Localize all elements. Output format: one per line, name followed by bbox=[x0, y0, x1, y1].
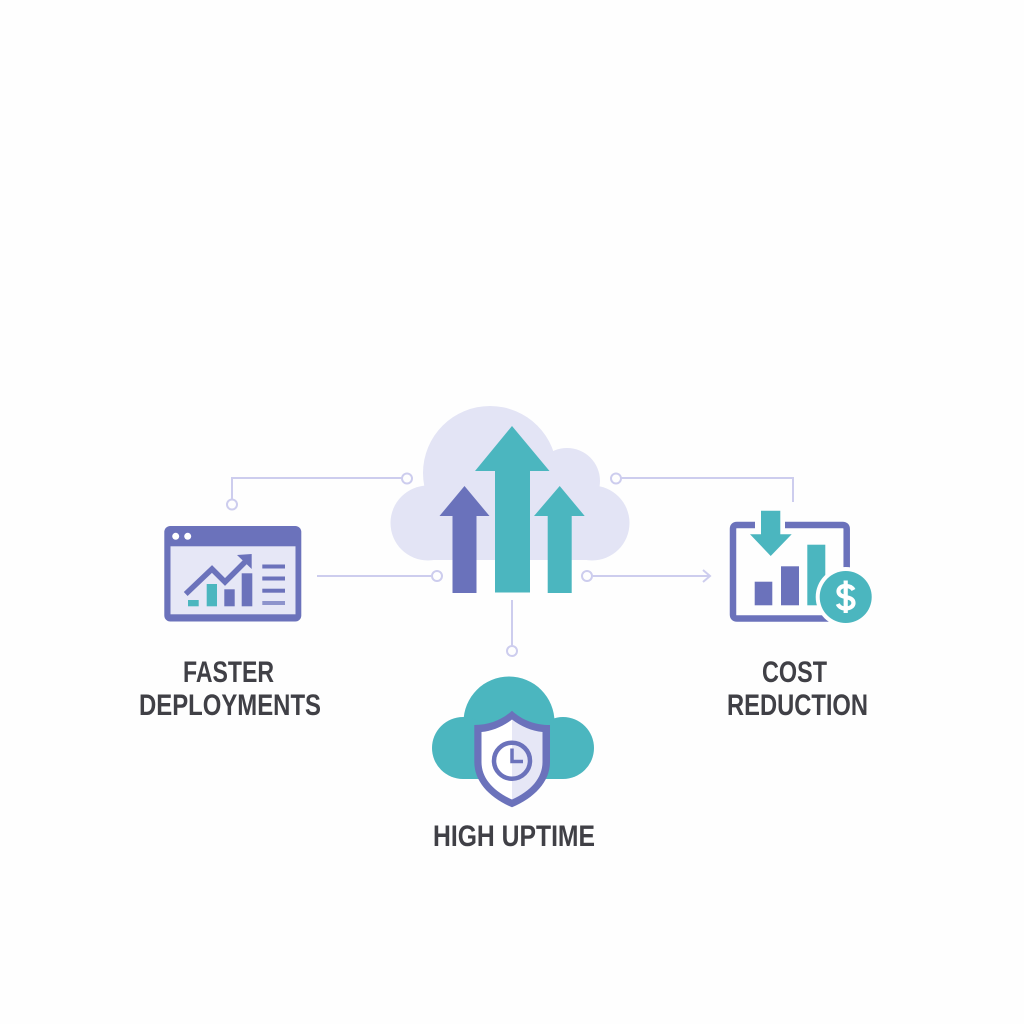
connector: bottom bbox=[507, 600, 517, 656]
icon: central cloud with arrows bbox=[390, 406, 630, 593]
browser content area bbox=[170, 546, 296, 614]
arrow: centre teal bbox=[475, 426, 550, 592]
chart frame bbox=[733, 525, 847, 618]
bars bbox=[188, 573, 252, 606]
list lines bbox=[262, 564, 285, 605]
connector: middle left bbox=[317, 571, 442, 581]
label: faster deployments: FASTER bbox=[183, 656, 274, 689]
label: cost reduction bbox=[727, 656, 868, 722]
connector: top right bbox=[611, 474, 793, 502]
label: cost reduction: COST bbox=[762, 656, 827, 689]
window dots bbox=[172, 533, 191, 540]
icon: browser dashboard bbox=[164, 526, 301, 622]
label: high uptime: HIGH UPTIME bbox=[433, 820, 595, 853]
connector: top left bbox=[227, 474, 412, 510]
clock bbox=[494, 743, 530, 779]
icon: cost reduction bbox=[733, 511, 876, 627]
browser frame bbox=[164, 526, 301, 622]
arrow: left purple bbox=[440, 486, 490, 593]
icon: cloud with shield bbox=[432, 676, 594, 807]
label: faster deployments bbox=[139, 656, 321, 722]
trend arrow bbox=[186, 554, 252, 594]
bars bbox=[755, 545, 825, 605]
shield bbox=[474, 711, 550, 807]
label: cost reduction: REDUCTION bbox=[727, 689, 868, 722]
connector arrow: middle right bbox=[582, 570, 710, 582]
down arrow bbox=[750, 511, 792, 556]
label: faster deployments: DEPLOYMENTS bbox=[139, 689, 321, 722]
coin bbox=[816, 567, 876, 627]
arrow: right teal bbox=[534, 486, 585, 593]
cloud bbox=[390, 406, 630, 560]
teal cloud bbox=[432, 676, 594, 779]
